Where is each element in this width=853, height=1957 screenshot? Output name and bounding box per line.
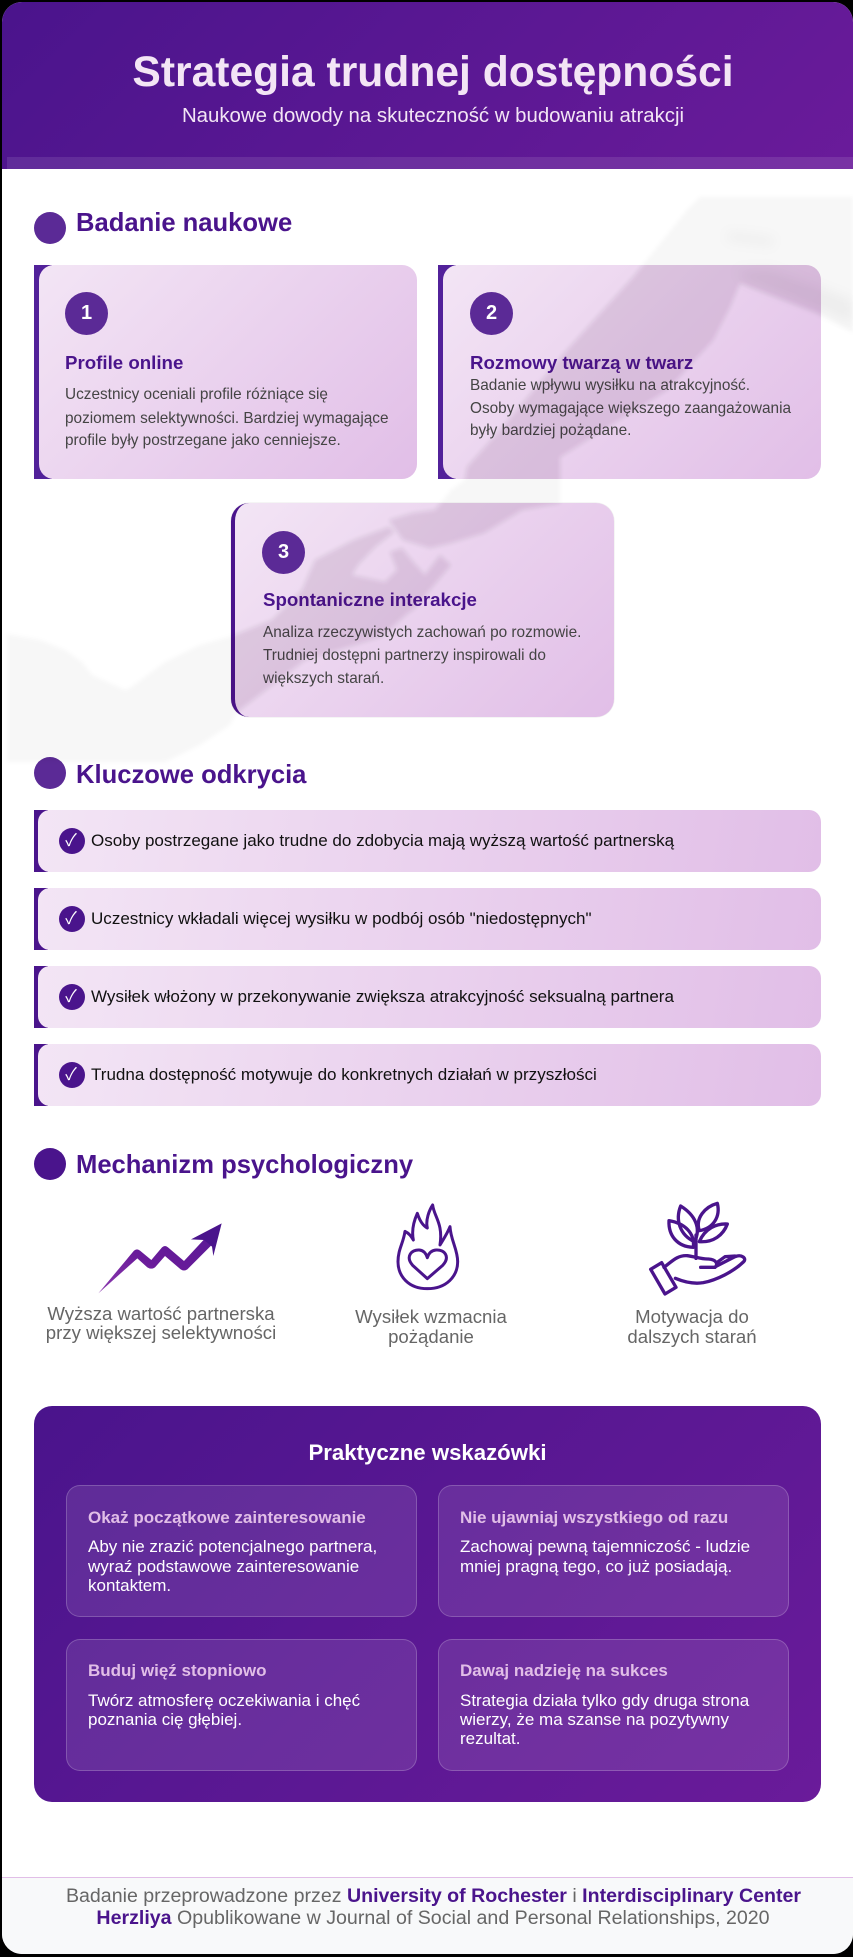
mechanism label 1: [46, 1303, 276, 1343]
card title: Rozmowy twarzą w twarz: [470, 352, 693, 373]
card text: [263, 624, 581, 687]
card text: [470, 377, 792, 439]
tip 4: [438, 1639, 789, 1771]
section heading: Kluczowe odkrycia: [76, 761, 306, 789]
number badge 1: 1: [81, 302, 92, 324]
footer: [0, 1877, 853, 1957]
card text: Uczestnicy oceniali profile różniące się: [65, 386, 328, 403]
section: Kluczowe odkrycia: [34, 757, 307, 789]
mechanism label 3: dalszych starań: [627, 1326, 757, 1347]
icon: plant in hand: [648, 1202, 746, 1296]
tip text: Zachowaj pewną tajemniczość - ludzie: [460, 1537, 750, 1556]
section bullet: [34, 212, 66, 244]
mechanism label 2: pożądanie: [388, 1326, 474, 1347]
finding 1: [34, 810, 821, 872]
tip text: Strategia działa tylko gdy druga strona: [460, 1691, 749, 1710]
finding text: Osoby postrzegane jako trudne do zdobycia mają wyższą wartość partnerską: [91, 831, 674, 850]
card text: większych starań.: [263, 670, 384, 687]
number badge 2: [470, 292, 513, 335]
header banner: [0, 0, 853, 169]
tip title: Okaż początkowe zainteresowanie: [88, 1508, 366, 1527]
card text: profile były postrzegane jako cenniejsze.: [65, 432, 341, 449]
card text: Trudniej dostępni partnerzy inspirowali do: [263, 647, 546, 664]
finding 3: [34, 966, 821, 1028]
card 3: Spontaniczne interakcje: [231, 503, 614, 717]
number badge 3: 3: [278, 541, 289, 563]
section bullet: [34, 1148, 66, 1180]
number badge 3: [262, 531, 305, 574]
header accent strip: [7, 157, 853, 169]
card text: Analiza rzeczywistych zachowań po rozmowie.: [263, 624, 581, 641]
tip title: Buduj więź stopniowo: [88, 1661, 266, 1680]
check icon: ✓: [65, 982, 77, 1007]
tip title: Dawaj nadzieję na sukces: [460, 1661, 668, 1680]
card text: Osoby wymagające większego zaangażowania: [470, 400, 791, 417]
finding text: Trudna dostępność motywuje do konkretnych działań w przyszłości: [91, 1065, 597, 1084]
card title: Profile online: [65, 352, 183, 373]
tip text: wyraź podstawowe zainteresowanie: [88, 1557, 359, 1576]
check icon: ✓: [65, 1060, 77, 1085]
section heading: Badanie naukowe: [76, 209, 292, 237]
section heading: Mechanizm psychologiczny: [76, 1151, 413, 1179]
section bullet: [34, 757, 66, 789]
check icon: [59, 1062, 85, 1088]
tip text: [88, 1537, 377, 1595]
card text: [65, 386, 389, 449]
mechanism label 3: [627, 1306, 757, 1347]
tip text: rezultat.: [460, 1729, 520, 1748]
tip text: wierzy, że ma szanse na pozytywny: [460, 1710, 729, 1729]
finding text: Uczestnicy wkładali więcej wysiłku w podbój osób "niedostępnych": [91, 909, 592, 928]
mechanism label 3: Motywacja do: [635, 1306, 749, 1327]
mechanism label 1: przy większej selektywności: [46, 1322, 276, 1343]
mechanism label 2: [355, 1306, 507, 1347]
tip text: mniej pragną tego, co już posiadają.: [460, 1557, 732, 1576]
tip text: poznania cię głębiej.: [88, 1710, 242, 1729]
icon: rising arrow: [98, 1223, 222, 1294]
mechanism label 1: Wyższa wartość partnerska: [47, 1303, 275, 1324]
tip text: [460, 1537, 750, 1576]
check icon: [59, 828, 85, 854]
card text: były bardziej pożądane.: [470, 422, 631, 439]
card text: poziomem selektywności. Bardziej wymagające: [65, 410, 389, 427]
footer line 1: Badanie przeprowadzone przez University of Rochester i Interdisciplinary Center: [66, 1885, 801, 1907]
tip text: [88, 1691, 360, 1729]
background image: reaching hands: [231, 224, 853, 712]
card 1: Profile online: [34, 265, 417, 479]
check icon: [59, 906, 85, 932]
title: Strategia trudnej dostępności: [132, 48, 734, 96]
card title: Spontaniczne interakcje: [263, 589, 477, 610]
finding 2: [34, 888, 821, 950]
icon: flame with heart: [396, 1203, 460, 1290]
panel heading: Praktyczne wskazówki: [308, 1440, 547, 1465]
section: Badanie naukowe: [34, 209, 292, 244]
number badge 2: 2: [486, 302, 497, 324]
card text: Badanie wpływu wysiłku na atrakcyjność.: [470, 377, 750, 394]
finding text: Wysiłek włożony w przekonywanie zwiększa atrakcyjność seksualną partnera: [91, 987, 674, 1006]
panel: practical tips: [34, 1406, 821, 1802]
tip title: Nie ujawniaj wszystkiego od razu: [460, 1508, 728, 1527]
finding 4: [34, 1044, 821, 1106]
section: Mechanizm psychologiczny: [34, 1148, 413, 1180]
card 2: Rozmowy twarzą w twarz: [438, 265, 821, 479]
tip 1: [66, 1485, 417, 1617]
check icon: [59, 984, 85, 1010]
footer line 2: Herzliya Opublikowane w Journal of Social and Personal Relationships, 2020: [96, 1907, 770, 1929]
check icon: ✓: [65, 904, 77, 929]
mechanism label 2: Wysiłek wzmacnia: [355, 1306, 507, 1327]
subtitle: Naukowe dowody na skuteczność w budowaniu atrakcji: [182, 105, 684, 127]
tip text: kontaktem.: [88, 1576, 171, 1595]
number badge 1: [65, 292, 108, 335]
check icon: ✓: [65, 826, 77, 851]
tip text: Twórz atmosferę oczekiwania i chęć: [88, 1691, 360, 1710]
tip text: [460, 1691, 750, 1748]
tip 3: [66, 1639, 417, 1771]
tip 2: [438, 1485, 789, 1617]
tip text: Aby nie zrazić potencjalnego partnera,: [88, 1537, 377, 1556]
